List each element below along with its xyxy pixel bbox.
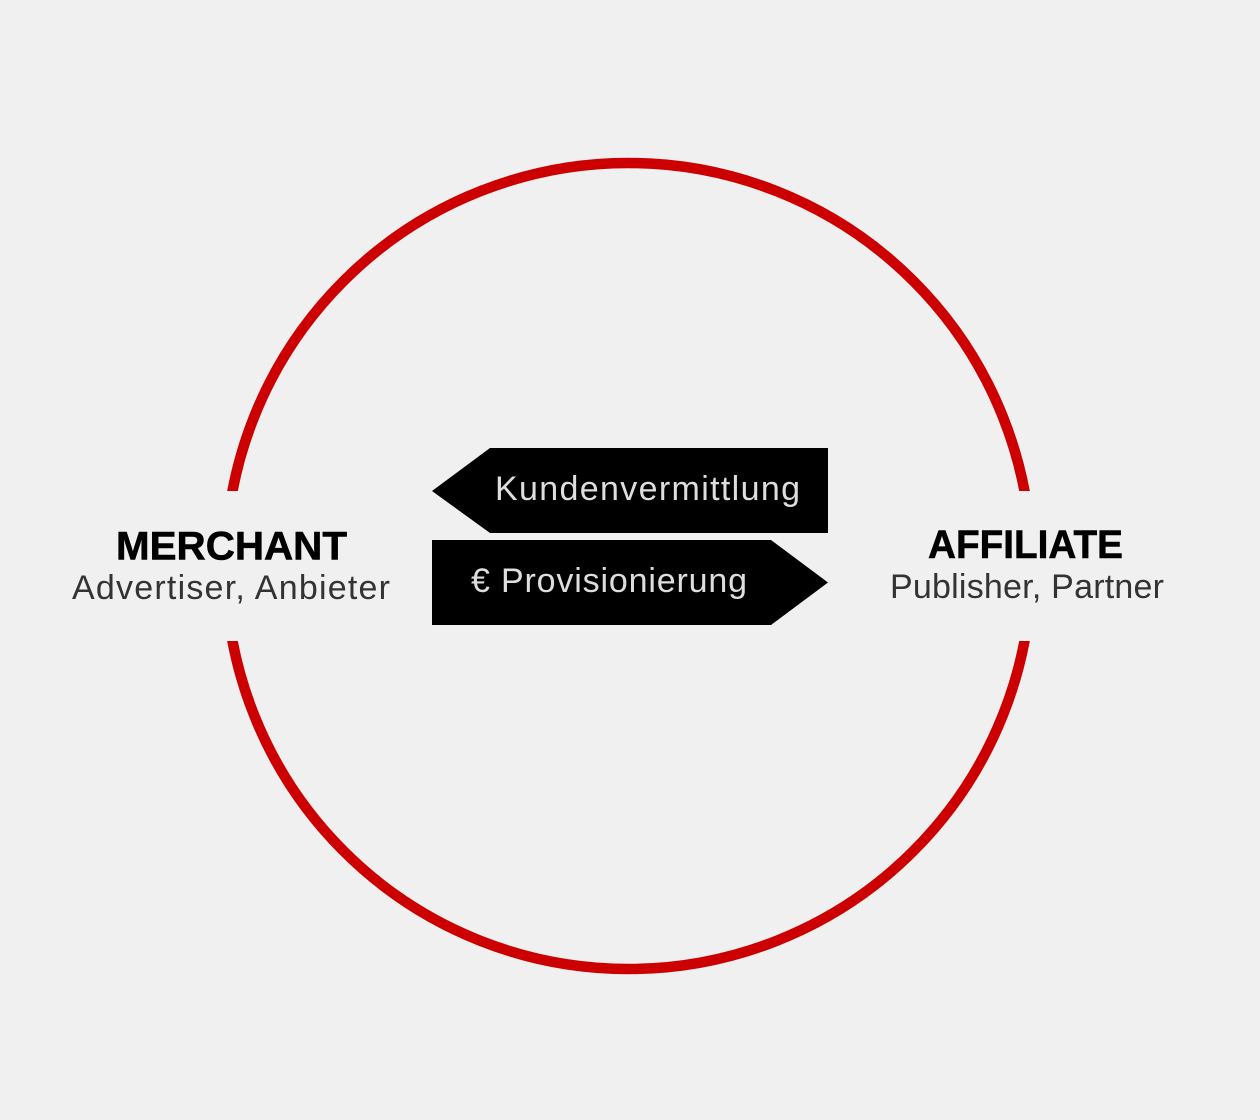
merchant heading: MERCHANT xyxy=(116,524,347,568)
arrow: Provisionierung pointing right xyxy=(432,540,828,625)
merchant subtitle: Advertiser, Anbieter xyxy=(72,569,390,607)
arrow: Kundenvermittlung pointing left: Kundenvermittlung xyxy=(495,470,800,508)
affiliate heading: AFFILIATE xyxy=(928,523,1123,567)
affiliate subtitle: Publisher, Partner xyxy=(890,568,1164,606)
arrow: Provisionierung pointing right: € Provisionierung xyxy=(471,562,747,600)
affiliate label xyxy=(890,523,1164,606)
diagram: merchant and affiliate cycle xyxy=(72,158,1164,974)
arrow: Kundenvermittlung pointing left xyxy=(432,448,828,533)
merchant label xyxy=(72,524,390,607)
red circle with gaps xyxy=(226,163,1032,969)
